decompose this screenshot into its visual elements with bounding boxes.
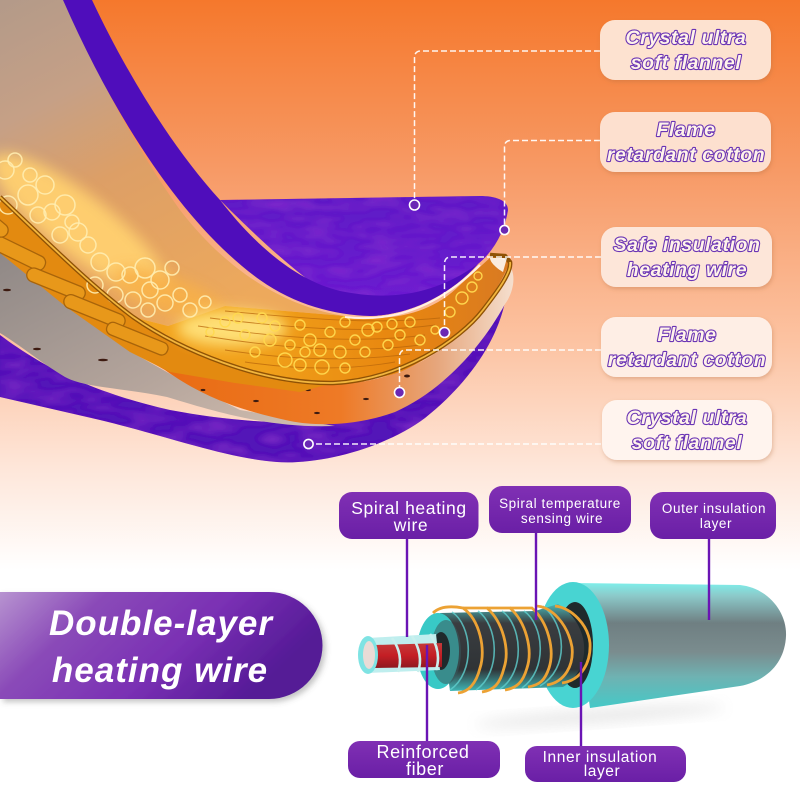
label: inner insulation layer: Inner insulation bbox=[543, 749, 657, 766]
label: outer insulation layer: Outer insulation bbox=[662, 501, 766, 516]
leader lines bbox=[313, 51, 601, 444]
outer insulation tube bbox=[573, 583, 786, 708]
label: outer insulation layer: layer bbox=[700, 516, 732, 531]
cable shadow bbox=[475, 701, 725, 731]
safe insulation heating wire, gold tube bbox=[0, 197, 510, 383]
wire grid lines bbox=[198, 311, 440, 368]
callout: top crystal ultra soft flannel: Crystal ultra bbox=[626, 27, 746, 49]
callout: safe insulation heating wire: Safe insulation bbox=[614, 234, 760, 256]
core ridge shading bbox=[450, 606, 561, 690]
core dark tube bbox=[440, 604, 584, 691]
callout: upper flame retardant cotton: Flame bbox=[656, 119, 716, 141]
core opening bbox=[432, 632, 450, 670]
callout: top crystal ultra soft flannel: soft flannel bbox=[631, 52, 741, 74]
layer: lower flame retardant cotton, gray underside bbox=[0, 250, 335, 426]
callout: lower flame retardant cotton: Flame bbox=[657, 324, 717, 346]
core shaded inner ring bbox=[431, 620, 461, 684]
layer: upper flame retardant cotton bbox=[0, 0, 345, 326]
reinforced fiber core bbox=[375, 643, 442, 668]
cut corner highlight bbox=[490, 258, 507, 272]
label: reinforced fiber: Reinforced bbox=[376, 742, 470, 762]
callout: safe insulation heating wire bbox=[601, 227, 772, 287]
perforation dots bbox=[3, 289, 469, 414]
label: spiral heating wire: Spiral heating bbox=[351, 498, 467, 518]
marker dots bbox=[304, 200, 509, 449]
banner: double-layer heating wire: Double-layer bbox=[49, 604, 274, 643]
outer tube opening bbox=[557, 602, 593, 688]
white rim under flannel bbox=[345, 265, 480, 318]
outer tube front face bbox=[537, 582, 609, 708]
label: spiral temperature sensing wire bbox=[489, 486, 631, 533]
layer: top flannel folded band bbox=[63, 0, 478, 316]
layer: lower flame retardant cotton, inner face bbox=[130, 266, 513, 424]
callout: upper flame retardant cotton: retardant cotton bbox=[607, 144, 765, 166]
label: reinforced fiber bbox=[348, 741, 500, 779]
spiral heating wire coils bbox=[392, 634, 438, 672]
banner: double-layer heating wire bbox=[0, 592, 322, 699]
bubbles on the cotton bbox=[0, 153, 211, 317]
callout: bottom crystal ultra soft flannel bbox=[602, 400, 772, 460]
illustration: heating blanket layers bbox=[0, 0, 513, 462]
cable illustration bbox=[358, 582, 786, 731]
spiral temperature sensing wire coils bbox=[433, 606, 590, 693]
label: outer insulation layer bbox=[650, 492, 776, 539]
callout: bottom crystal ultra soft flannel: soft flannel bbox=[632, 432, 742, 454]
callout: bottom crystal ultra soft flannel: Crystal ultra bbox=[627, 407, 747, 429]
layer: top crystal flannel surface bbox=[220, 196, 508, 316]
background gradient bbox=[0, 0, 800, 570]
label: spiral temperature sensing wire: Spiral temperature bbox=[499, 496, 621, 511]
pointer lines bbox=[407, 533, 709, 746]
hot spot bbox=[177, 310, 287, 346]
callout: safe insulation heating wire: heating wire bbox=[627, 259, 747, 281]
bubbles on the heating pad bbox=[206, 272, 482, 374]
callout: lower flame retardant cotton: retardant cotton bbox=[608, 349, 766, 371]
label: spiral heating wire: wire bbox=[393, 515, 428, 535]
label: spiral heating wire bbox=[339, 492, 478, 539]
label: spiral temperature sensing wire: sensing wire bbox=[521, 511, 603, 526]
callout: upper flame retardant cotton bbox=[600, 112, 771, 172]
core end cap bbox=[358, 636, 378, 674]
fiber core sleeve bbox=[368, 634, 440, 673]
callout: lower flame retardant cotton bbox=[601, 317, 772, 377]
callout: top crystal ultra soft flannel bbox=[600, 20, 771, 80]
label: reinforced fiber: fiber bbox=[406, 759, 444, 779]
label: inner insulation layer: layer bbox=[584, 763, 620, 780]
glow on cotton bbox=[0, 148, 222, 317]
banner: double-layer heating wire: heating wire bbox=[52, 651, 268, 690]
serpentine wire loops bbox=[0, 210, 170, 357]
layer: heating pad with wire grid bbox=[133, 256, 510, 382]
layer: serpentine heating pad under wire bbox=[0, 195, 333, 392]
layer: bottom crystal flannel bbox=[0, 302, 505, 462]
core tube front face bbox=[417, 613, 459, 689]
label: inner insulation layer bbox=[525, 746, 686, 782]
gold wire highlight bbox=[0, 197, 510, 383]
